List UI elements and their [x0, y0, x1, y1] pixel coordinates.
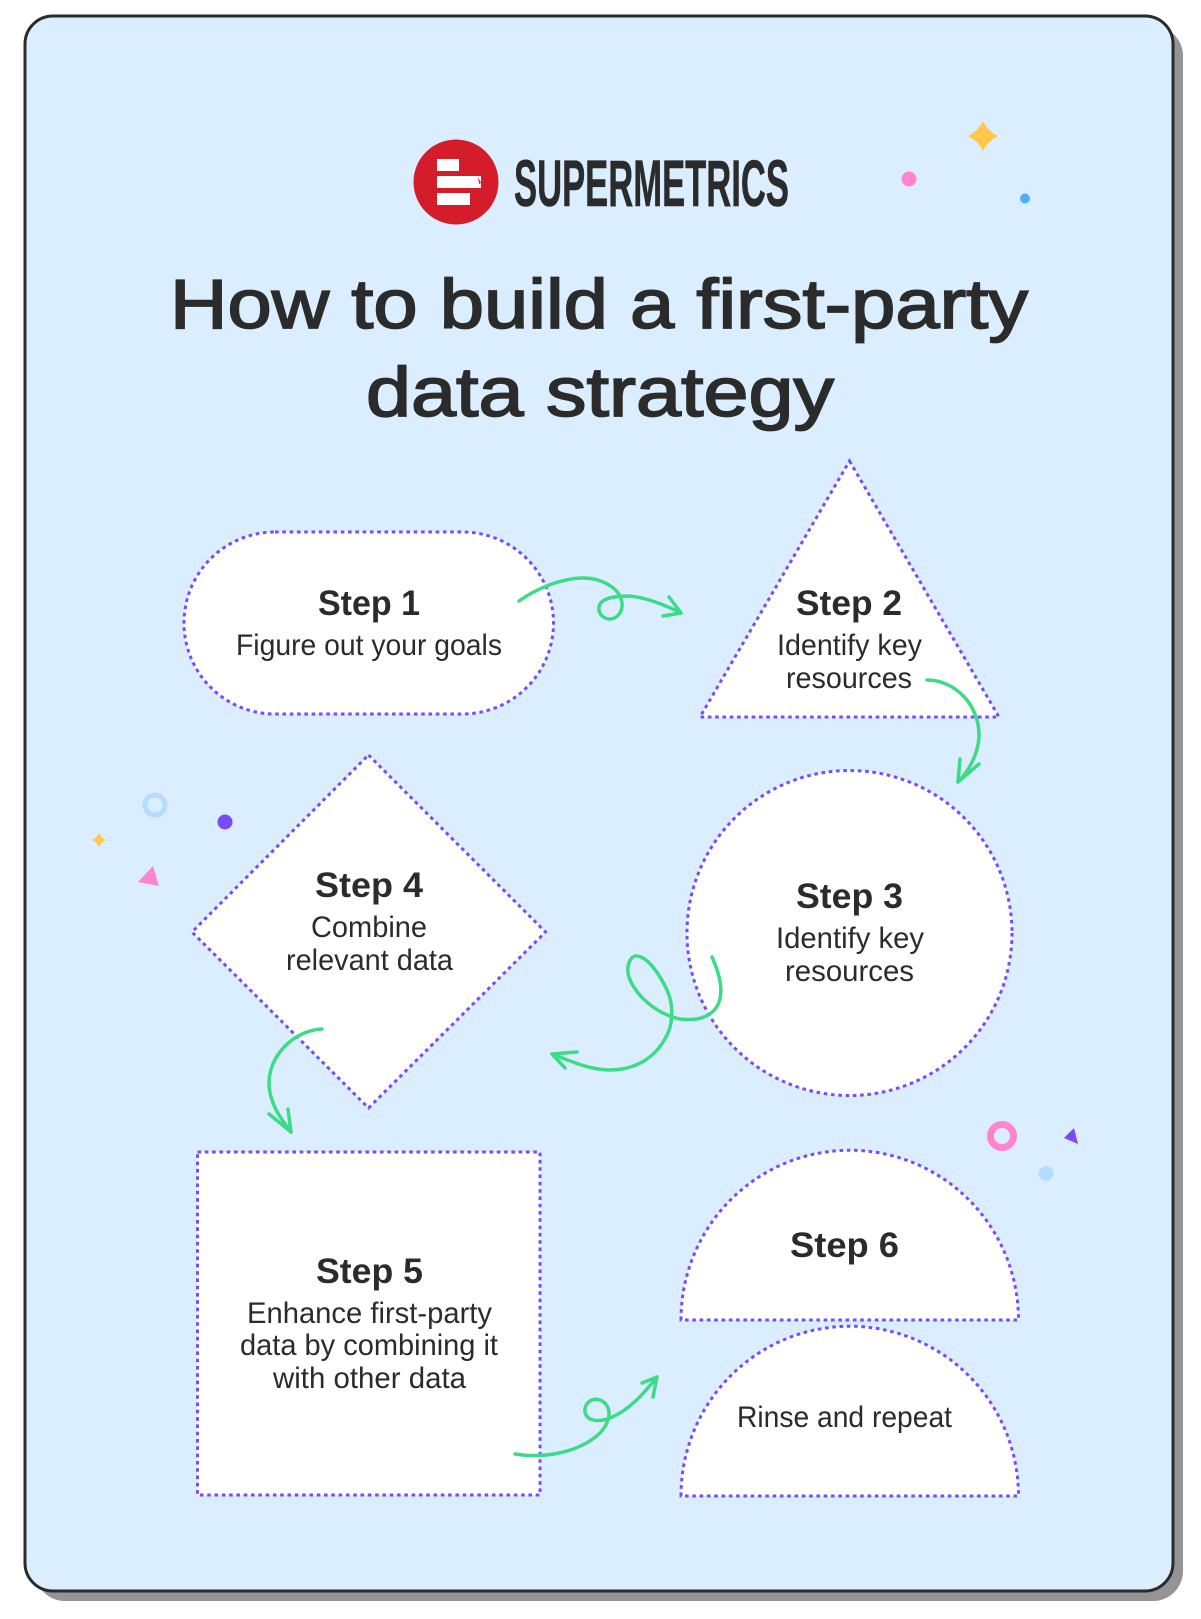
panel: step 4 — [192, 755, 546, 1108]
panel: step 3: Identify key — [776, 922, 924, 955]
panel: step 2: Identify key — [777, 629, 922, 662]
panel: step 3 — [687, 770, 1012, 1096]
panel: step 6: Rinse and repeat — [737, 1401, 953, 1434]
panel: step 6 — [681, 1150, 1018, 1496]
decoration: left shapes — [92, 795, 232, 886]
panel: step 2: Step 2 — [796, 584, 902, 623]
panel: step 3: resources — [785, 955, 914, 988]
panel: step 5: with other data — [272, 1362, 466, 1395]
panel: step 1: Step 1 — [318, 584, 420, 623]
panel: step 5: Enhance first-party — [247, 1297, 492, 1330]
panel: step 4: relevant data — [286, 944, 453, 977]
arrow: step 4 to step 5 — [269, 1029, 322, 1132]
title — [170, 265, 1028, 431]
panel: step 2 — [700, 461, 999, 717]
panel: step 4: Combine — [311, 911, 427, 944]
arrow: step 3 to step 4 — [552, 956, 721, 1070]
logo: Supermetrics — [414, 140, 789, 224]
logo: Supermetrics: SUPERMETRICS — [514, 146, 789, 220]
panel: step 2: resources — [786, 662, 912, 695]
arrow: step 2 to step 3 — [927, 680, 979, 782]
arrow: step 1 to step 2 — [519, 578, 681, 619]
decoration: right shapes — [990, 1124, 1078, 1181]
panel: step 5: Step 5 — [316, 1252, 423, 1291]
arrow: step 5 to step 6 — [515, 1377, 657, 1456]
panel: step 4: Step 4 — [315, 866, 424, 905]
panel: step 3: Step 3 — [796, 877, 903, 916]
title: How to build a first-party — [170, 265, 1028, 343]
decoration: top right sparkles — [902, 121, 1030, 204]
panel: step 5 — [198, 1152, 540, 1495]
title: data strategy — [366, 353, 834, 431]
panel: step 1 — [184, 532, 554, 714]
panel: step 6: Step 6 — [790, 1226, 899, 1265]
panel: step 1: Figure out your goals — [236, 629, 502, 662]
panel: step 5: data by combining it — [240, 1329, 499, 1362]
